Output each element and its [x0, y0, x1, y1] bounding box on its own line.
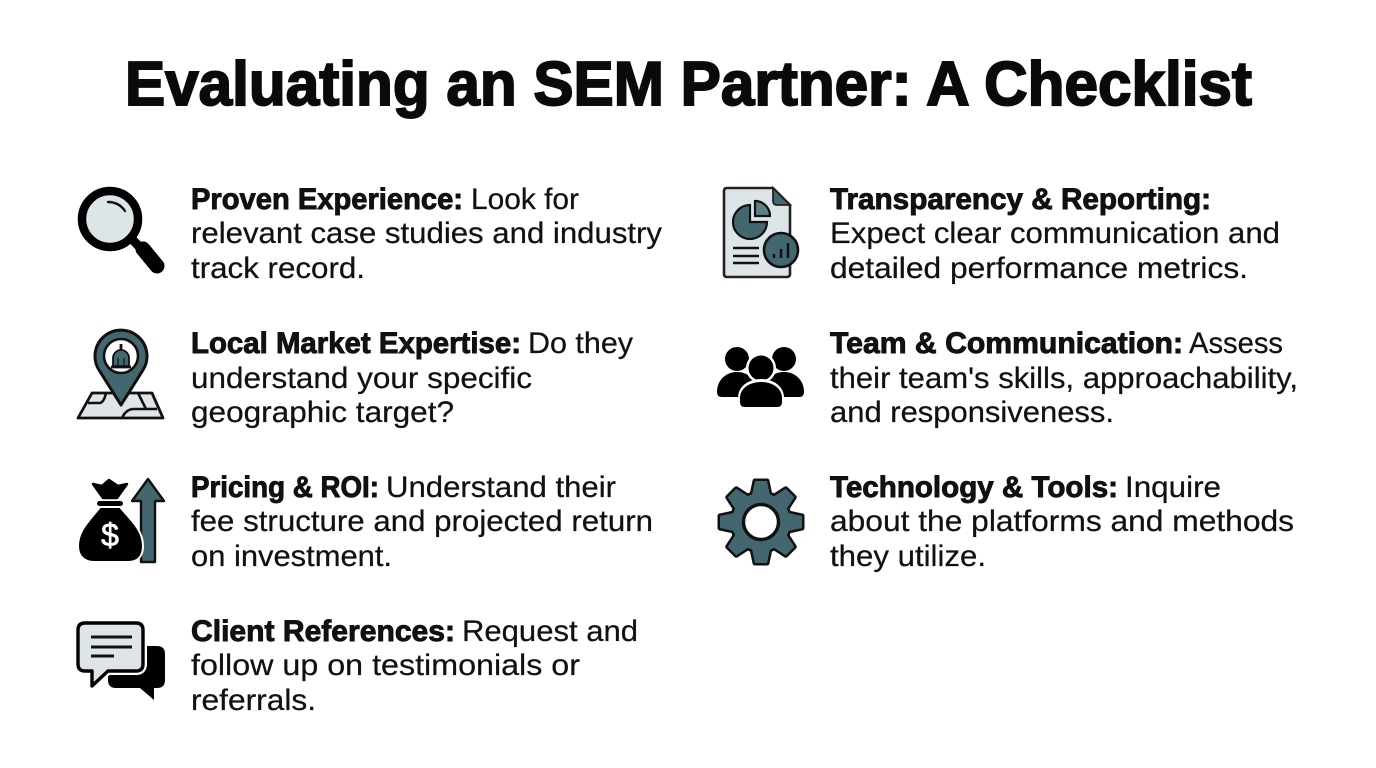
text block: local market expertise: understand your specific: [191, 362, 532, 395]
text block: pricing and roi: [191, 471, 653, 573]
text block: local market expertise: geographic target?: [191, 396, 454, 429]
icon: speech bubbles: [78, 623, 165, 700]
text block: technology and tools: Inquire: [1125, 471, 1221, 504]
icon: team: [717, 347, 804, 409]
text block: proven experience: [191, 183, 662, 285]
text block: transparency and reporting: Expect clear communication and: [830, 217, 1280, 250]
text block: local market expertise: Do they: [528, 327, 633, 360]
icon: gear: [720, 481, 802, 563]
text block: proven experience: track record.: [191, 252, 365, 285]
text block: team and communication: their team's skills, approachability,: [830, 362, 1298, 395]
icon: money bag with arrow: $: [101, 517, 119, 553]
text block: proven experience: relevant case studies and industry: [191, 217, 662, 250]
text block: client references: follow up on testimonials or: [191, 649, 580, 682]
text block: pricing and roi: Understand their: [386, 471, 616, 504]
text block: client references: referrals.: [191, 684, 316, 717]
text block: technology and tools: [830, 471, 1294, 573]
text block: proven experience: Proven Experience:: [191, 183, 463, 216]
icon: magnifying glass: [82, 191, 157, 266]
text block: transparency and reporting: [830, 183, 1280, 285]
text block: technology and tools: they utilize.: [830, 540, 986, 573]
text block: client references: [191, 615, 638, 717]
text block: pricing and roi: on investment.: [191, 540, 392, 573]
text block: technology and tools: about the platforms and methods: [830, 505, 1294, 538]
text block: transparency and reporting: Transparency & Reporting:: [830, 183, 1211, 216]
text block: transparency and reporting: detailed performance metrics.: [830, 252, 1248, 285]
text block: pricing and roi: Pricing & ROI:: [191, 471, 379, 504]
text block: local market expertise: Local Market Expertise:: [191, 327, 521, 360]
text block: team and communication: [830, 327, 1298, 429]
text block: team and communication: Team & Communication:: [830, 327, 1183, 360]
text block: team and communication: Assess: [1189, 327, 1283, 360]
text block: technology and tools: Technology & Tools:: [830, 471, 1118, 504]
text block: proven experience: Look for: [471, 183, 579, 216]
text block: client references: Request and: [462, 615, 638, 648]
text block: client references: Client References:: [191, 615, 455, 648]
icon: report document: [724, 188, 798, 277]
text block: team and communication: and responsiveness.: [830, 396, 1114, 429]
icon: money bag with arrow: [78, 479, 164, 562]
text block: local market expertise: [191, 327, 633, 429]
title: Evaluating an SEM Partner: A Checklist: [125, 50, 1252, 119]
text block: pricing and roi: fee structure and projected return: [191, 505, 653, 538]
icon: map pin: [78, 330, 163, 418]
